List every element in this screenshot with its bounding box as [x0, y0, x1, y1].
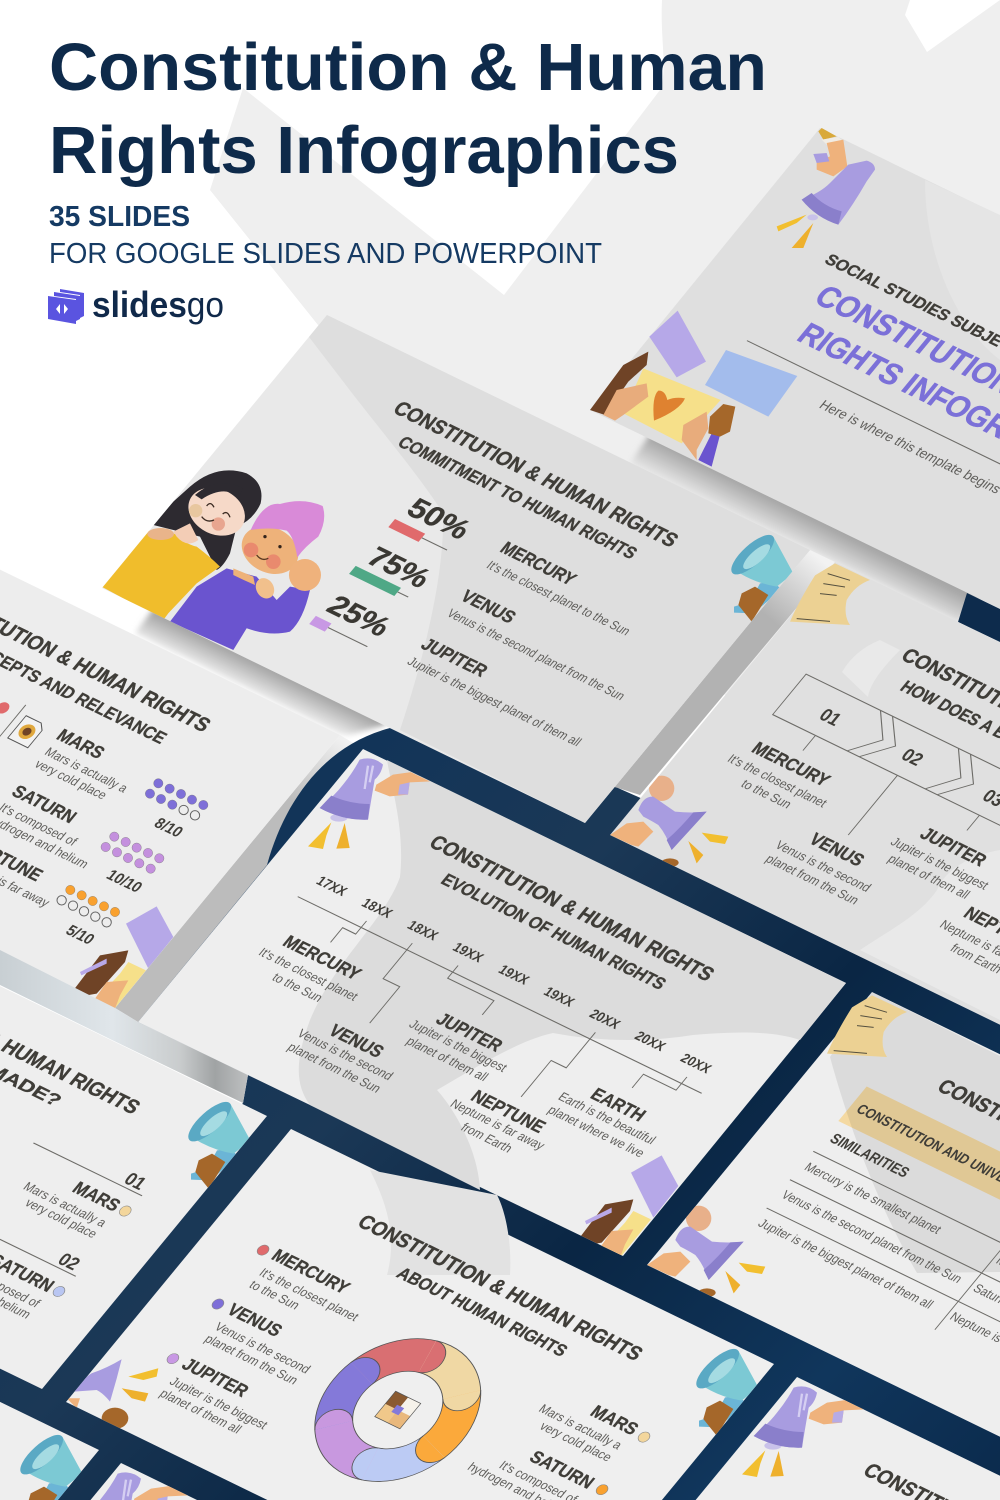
- slide text and chevrons: Jupiter is the biggest: [888, 835, 992, 893]
- timeline and text: 18XX: [404, 918, 442, 943]
- timeline and text: planet of them all: [403, 1034, 491, 1084]
- slide text and percentages: JUPITER: [417, 634, 492, 681]
- timeline and text: 18XX: [358, 895, 396, 921]
- darker silhouette area: [309, 315, 810, 823]
- slide text and chevrons: planet of them all: [885, 852, 973, 902]
- slide text and percentages: MERCURY: [496, 538, 581, 589]
- timeline and text: 20XX: [632, 1028, 669, 1054]
- icon: four joined hands: [375, 1391, 421, 1429]
- icon: teal megaphone: [188, 1102, 249, 1188]
- slide text: CONSTITUTION & HUMAN RIGHTS: [353, 1211, 647, 1365]
- slide text and chevrons: 02: [897, 744, 928, 770]
- darker silhouette area: [370, 1170, 510, 1275]
- icon: stacked slides: [48, 289, 84, 324]
- navy block top right: [958, 593, 1000, 642]
- slide text: Jupiter is the biggest: [167, 1374, 271, 1432]
- slide text: MARS: [68, 1178, 125, 1215]
- shadow below commitment slide: [135, 593, 390, 735]
- timeline and text: Earth is the beautiful: [555, 1090, 659, 1147]
- slide text: [140, 1183, 703, 1500]
- slide text: planet of them all: [157, 1387, 245, 1436]
- icon: lilac megaphone: [742, 1386, 865, 1477]
- illustration: protest signs: [590, 311, 797, 467]
- slide text and chevrons: 01: [815, 704, 846, 730]
- title: Constitution & Human: [49, 30, 767, 105]
- slide text: Mars is actually a: [536, 1402, 625, 1452]
- timeline and text: CONSTITUTION & HUMAN RIGHTS: [424, 832, 719, 986]
- icon: parchment scroll: [790, 563, 870, 625]
- slide text and percentages: 25%: [321, 590, 397, 642]
- slide: commitment to human rights: [102, 315, 810, 823]
- timeline and text: 19XX: [495, 962, 533, 988]
- slide: evolution of human rights: [138, 749, 846, 1258]
- icon: megaphone with fists: [610, 776, 728, 867]
- timeline and text: 20XX: [586, 1006, 624, 1032]
- timeline and text: Neptune is far away: [447, 1097, 548, 1153]
- timeline and text: from Earth: [458, 1120, 516, 1155]
- slide: bottom small with lilac megaphone: [90, 1463, 197, 1500]
- icon: teal megaphone: [731, 534, 792, 622]
- slide text: MARS: [53, 725, 109, 763]
- darker silhouette area: [299, 760, 846, 1190]
- slide text: Mars is actually a: [42, 745, 131, 795]
- slide: bottom left with teal megaphone: [0, 1402, 99, 1500]
- slide text and percentages: CONSTITUTION & HUMAN RIGHTS: [388, 398, 683, 552]
- slide text: 10/10: [103, 867, 146, 896]
- slide text and chevrons: VENUS: [805, 829, 869, 870]
- slide text and percentages: Jupiter is the biggest planet of them all: [404, 654, 584, 749]
- slide text and percentages: 75%: [361, 541, 437, 594]
- slide text and chevrons: JUPITER: [916, 823, 991, 870]
- shadow below top slide: [628, 420, 980, 622]
- timeline and text: planet where we live: [545, 1103, 648, 1160]
- timeline and text: EVOLUTION OF HUMAN RIGHTS: [437, 870, 670, 993]
- dot ratings: [57, 779, 208, 927]
- lighter area: [860, 850, 1000, 1020]
- timeline and text: [203, 801, 780, 1209]
- slide text and chevrons: It's the closest planet: [724, 752, 830, 810]
- lighter circular area: [925, 180, 1000, 360]
- slide text: It's the closest planet: [256, 1266, 362, 1324]
- slide text and chevrons: to the Sun: [738, 777, 795, 811]
- slide text and table: [743, 1051, 1000, 1421]
- title: Rights Infographics: [49, 113, 679, 188]
- slide text and percentages: It's the closest planet to the Sun: [484, 558, 633, 638]
- shadow gap above how is it made slide: [0, 950, 248, 1103]
- slide text and table: Venus is the second planet from the Sun: [778, 1188, 965, 1286]
- slide text and percentages: Venus is the second planet from the Sun: [444, 606, 628, 703]
- slide text: 02: [54, 1248, 85, 1274]
- slide text: Venus is the second: [212, 1320, 313, 1376]
- slide text: MERCURY: [267, 1245, 354, 1298]
- slide text and chevrons: planet from the Sun: [763, 852, 862, 907]
- timeline and text: It's the closest planet: [256, 945, 362, 1004]
- slide: how is it made: [0, 986, 267, 1389]
- slide text: [726, 247, 1000, 534]
- logo: slidesgo: [48, 284, 224, 325]
- slide text: 5/10: [62, 922, 98, 948]
- wordmark: slidesgo: [92, 284, 224, 325]
- illustration: two children: [102, 470, 324, 650]
- illustration: hands with signs: [578, 1155, 678, 1258]
- slide text: Mars is actually a: [20, 1179, 110, 1230]
- timeline and text: Venus is the second: [294, 1026, 396, 1083]
- timeline and text: 17XX: [313, 873, 351, 899]
- icon: teal megaphone: [20, 1434, 82, 1500]
- timeline and text: to the Sun: [269, 970, 326, 1005]
- slide text and percentages: COMMITMENT TO HUMAN RIGHTS: [394, 433, 641, 563]
- slide: about human rights: [66, 1129, 774, 1500]
- timeline and text: 19XX: [541, 984, 578, 1010]
- gap strip between commitment and bill slides: [585, 550, 835, 823]
- slide text: very cold place: [22, 1196, 100, 1241]
- navy rounded background panel: [0, 728, 1000, 1500]
- slide: concepts and relevance: [0, 570, 340, 1008]
- slide text and table: Jupiter is the biggest planet of them all: [755, 1216, 936, 1311]
- slide text: SATURN: [8, 781, 81, 827]
- icon: lilac megaphone: [100, 1472, 188, 1500]
- slide text and chevrons: Venus is the second: [772, 838, 874, 895]
- icon: lilac megaphone left: [67, 1359, 158, 1429]
- background silhouette shape: [210, 0, 1000, 800]
- slide text and chevrons: MERCURY: [748, 738, 835, 790]
- timeline and text: EARTH: [586, 1084, 650, 1125]
- slide text: to the Sun: [246, 1278, 303, 1312]
- slide: title slide: [590, 128, 1000, 645]
- slide text and percentages: [243, 398, 736, 754]
- slide: how does a bill: [610, 562, 1000, 1070]
- icon: parchment scroll: [827, 995, 907, 1057]
- icon: megaphone with lightning: [777, 128, 875, 248]
- slide text and table: SIMILARITIES: [826, 1131, 913, 1181]
- slide text: very cold place: [537, 1419, 615, 1464]
- slide text: ABOUT HUMAN RIGHTS: [393, 1264, 572, 1360]
- timeline and text: JUPITER: [432, 1009, 507, 1056]
- slide text: 01: [120, 1168, 151, 1194]
- slide text and percentages: 50%: [401, 492, 477, 545]
- slide text: Here is where this template begins: [816, 397, 1000, 497]
- slide: constitution and universal declaration: [647, 992, 1000, 1437]
- subtitle: slide count: 35 SLIDES: [49, 201, 190, 233]
- slide: bottom right: [696, 1377, 1000, 1500]
- slide text: MARS: [586, 1401, 643, 1439]
- slide text and table: Mercury is the smallest planet: [801, 1160, 945, 1237]
- slide text: VENUS: [223, 1299, 287, 1341]
- slide text: SATURN: [525, 1447, 599, 1492]
- slide text: JUPITER: [178, 1354, 253, 1401]
- timeline and text: 19XX: [450, 940, 487, 965]
- timeline and text: VENUS: [325, 1020, 389, 1062]
- icon: teal megaphone right: [696, 1348, 757, 1434]
- title: [49, 30, 767, 188]
- illustration: hands with signs: [73, 906, 173, 1009]
- icon: lilac megaphone: [308, 758, 431, 849]
- slide text and chevrons: [677, 614, 1000, 1023]
- timeline and text: 20XX: [677, 1051, 715, 1076]
- timeline and text: planet from the Sun: [284, 1040, 384, 1096]
- slide text and percentages: VENUS: [457, 586, 521, 627]
- timeline and text: MERCURY: [279, 931, 366, 984]
- slide text: 8/10: [150, 815, 186, 841]
- slide text: [0, 963, 200, 1327]
- timeline and text: Jupiter is the biggest: [406, 1017, 511, 1075]
- darker silhouette area: [830, 992, 1000, 1273]
- icon: megaphone with fists: [647, 1206, 765, 1297]
- slide text: planet from the Sun: [202, 1332, 301, 1387]
- slide text: very cold place: [32, 757, 110, 802]
- lighter wedge: [842, 640, 900, 697]
- highlighted heading band: [838, 1087, 1000, 1306]
- donut chart: [281, 1315, 515, 1500]
- subtitle: compatibility: FOR GOOGLE SLIDES AND POWERPOINT: [49, 238, 602, 270]
- gap strip between concepts and evolution slides: [115, 735, 363, 1022]
- slide text: [0, 582, 262, 950]
- timeline and text: NEPTUNE: [467, 1086, 550, 1137]
